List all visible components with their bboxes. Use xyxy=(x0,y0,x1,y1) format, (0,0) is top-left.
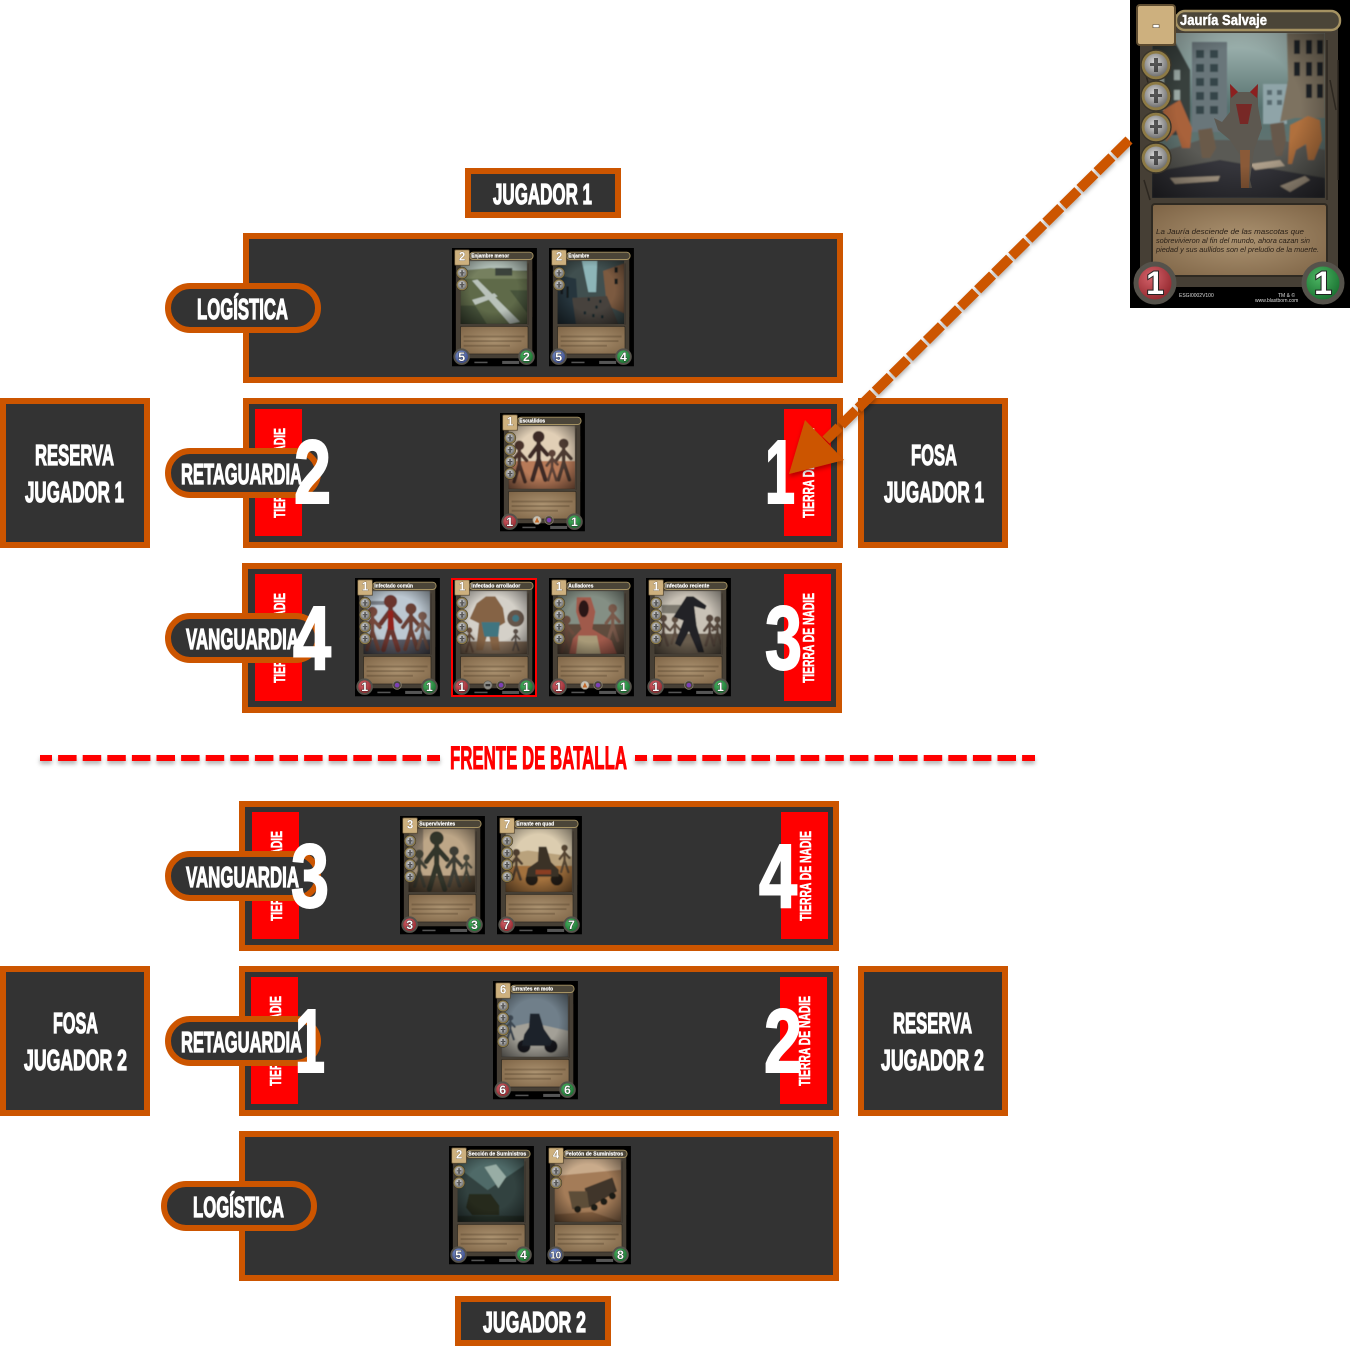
number 1: 1 xyxy=(765,423,795,523)
card: Enjambre menor: 2 xyxy=(523,350,530,364)
card: Sección de Suministros: 2 xyxy=(456,1150,462,1162)
card flavour text: La Jauría desciende de las mascotas que xyxy=(1156,227,1304,236)
card: Escuálidos: 1 xyxy=(506,515,513,529)
card: Infectado arrollador: 1 xyxy=(459,582,466,594)
card: Infectado común: 1 xyxy=(362,582,369,594)
pill: logistica player 2 xyxy=(164,1184,314,1228)
player 1 label xyxy=(468,171,618,215)
box: fosa jugador 2: JUGADOR 2 xyxy=(24,1045,127,1077)
card: Escuálidos: Escuálidos xyxy=(519,419,545,425)
pill: logistica player 2: LOGÍSTICA xyxy=(193,1190,284,1224)
number 2 player 2: 2 xyxy=(764,992,802,1092)
card: Infectado reciente: 1 xyxy=(717,680,724,694)
card flavour text xyxy=(1155,227,1319,254)
strip: tierra de nadie left xyxy=(255,409,302,536)
player 2 label xyxy=(458,1299,608,1343)
box: reserva jugador 1: JUGADOR 1 xyxy=(25,477,124,509)
card: Infectado reciente: 1 xyxy=(653,582,660,594)
strip: tierra de nadie right: TIERRA DE NADIE xyxy=(798,831,815,921)
pill: vanguardia player 2: VANGUARDIA xyxy=(186,862,299,894)
box: reserva jugador 2: JUGADOR 2 xyxy=(881,1045,984,1077)
card flavour text: piedad y sus aullidos son el preludio de la muerte. xyxy=(1155,245,1319,254)
card: Sección de Suministros xyxy=(449,1146,534,1264)
card: Sección de Suministros: 4 xyxy=(520,1248,527,1262)
box: reserva jugador 1 xyxy=(3,401,147,545)
card: Errante en quad: Errante en quad xyxy=(516,822,555,828)
card: Aulladores: 1 xyxy=(556,582,563,594)
card: Supervivientes: Supervivientes xyxy=(419,822,455,828)
card: Escuálidos: 1 xyxy=(571,515,578,529)
pill: retaguardia player 2 xyxy=(168,1019,318,1063)
pill: retaguardia player 1: RETAGUARDIA xyxy=(181,459,302,491)
card: Enjambre: Enjambre xyxy=(568,254,590,260)
card: Supervivientes: 3 xyxy=(407,820,413,832)
frente de batalla divider: FRENTE DE BATALLA xyxy=(450,740,627,776)
card: Infectado arrollador: 1 xyxy=(523,680,530,694)
box: fosa jugador 1: JUGADOR 1 xyxy=(884,477,984,509)
strip: tierra de nadie right: TIERRA DE NADIE xyxy=(801,428,818,518)
card: Aulladores: 1 xyxy=(620,680,627,694)
card art: wild dogs in ruined city xyxy=(1152,33,1325,198)
strip: tierra de nadie right: TIERRA DE NADIE xyxy=(801,593,818,683)
strip: tierra de nadie right xyxy=(784,574,831,701)
card attack value: 1 xyxy=(1146,265,1164,301)
strip: tierra de nadie left xyxy=(251,977,298,1104)
panel: retaguardia player 1 xyxy=(246,401,840,545)
strip: tierra de nadie left: TIERRA DE NADIE xyxy=(272,593,289,683)
card: Errantes en moto: 6 xyxy=(500,985,506,997)
number 3 player 2: 3 xyxy=(291,827,329,927)
card: Infectado reciente: 1 xyxy=(652,680,659,694)
card detail: Jauría Salvaje xyxy=(1130,0,1350,308)
strip: tierra de nadie left xyxy=(252,812,299,939)
card: Errantes en moto: 6 xyxy=(564,1083,571,1097)
card: Enjambre: 5 xyxy=(555,350,562,364)
box: reserva jugador 2: RESERVA xyxy=(893,1008,972,1040)
selected card outline xyxy=(452,579,536,696)
card: Infectado arrollador: 1 xyxy=(458,680,465,694)
pill: retaguardia player 1 xyxy=(168,451,318,495)
card: Supervivientes: 3 xyxy=(471,918,478,932)
box: fosa jugador 1: FOSA xyxy=(911,440,957,472)
card footer: www.blastborn.com xyxy=(1255,298,1298,304)
card: Infectado común: Infectado común xyxy=(374,584,413,590)
card: Pelotón de Suministros: 4 xyxy=(553,1150,560,1162)
card: Errante en quad: 7 xyxy=(568,918,575,932)
strip: tierra de nadie right: TIERRA DE NADIE xyxy=(797,996,814,1086)
card: Enjambre menor xyxy=(452,248,537,366)
card: Enjambre menor: 2 xyxy=(459,252,465,264)
card: Infectado común xyxy=(355,578,440,696)
pill: logistica player 1: LOGÍSTICA xyxy=(197,292,288,326)
card footer: TM & © xyxy=(1278,292,1295,299)
pill: vanguardia player 2 xyxy=(168,854,318,898)
strip: tierra de nadie left xyxy=(255,574,302,701)
pill: vanguardia player 1 xyxy=(168,616,318,660)
card: Enjambre menor: Enjambre menor xyxy=(471,254,510,260)
card: Infectado común: 1 xyxy=(361,680,368,694)
card: Sección de Suministros: 5 xyxy=(455,1248,462,1262)
strip: tierra de nadie left: TIERRA DE NADIE xyxy=(268,996,285,1086)
arrow: card detail to fosa slot xyxy=(789,140,1129,474)
card: Escuálidos: 1 xyxy=(507,417,514,429)
pill: logistica player 1 xyxy=(168,286,318,330)
box: reserva jugador 2 xyxy=(861,969,1005,1113)
card: Aulladores: Aulladores xyxy=(568,584,593,590)
box: fosa jugador 1 xyxy=(861,401,1005,545)
player 2 label: JUGADOR 2 xyxy=(483,1307,586,1339)
card: Enjambre xyxy=(549,248,634,366)
card: Enjambre: 2 xyxy=(556,252,562,264)
pill: vanguardia player 1: VANGUARDIA xyxy=(186,624,299,656)
card footer: ESGI0002V100 xyxy=(1179,293,1214,299)
panel: logistica player 1 xyxy=(246,236,840,380)
box: fosa jugador 2: FOSA xyxy=(53,1008,98,1040)
card footer xyxy=(1179,292,1298,304)
card: Supervivientes xyxy=(400,816,485,934)
number 4 player 2: 4 xyxy=(759,827,797,927)
card: Infectado común: 1 xyxy=(426,680,433,694)
strip: tierra de nadie left: TIERRA DE NADIE xyxy=(269,831,286,921)
card: Sección de Suministros: Sección de Suministros xyxy=(468,1152,526,1158)
card: Infectado arrollador: Infectado arrollador xyxy=(471,584,521,590)
card: Enjambre: 4 xyxy=(620,350,627,364)
card: Enjambre menor: 5 xyxy=(458,350,465,364)
strip: tierra de nadie right xyxy=(780,977,827,1104)
card title: Jauría Salvaje xyxy=(1180,12,1267,29)
number 1 player 2: 1 xyxy=(295,992,325,1092)
card: Pelotón de Suministros: 10 xyxy=(550,1251,562,1262)
card: Errante en quad: 7 xyxy=(503,918,510,932)
card flavour text: sobrevivieron al fin del mundo, ahora cazan sin xyxy=(1156,236,1310,245)
number 3: 3 xyxy=(765,589,802,689)
card: Pelotón de Suministros: 8 xyxy=(617,1248,624,1262)
card: Errantes en moto: Errantes en moto xyxy=(512,987,554,993)
card: Aulladores: 1 xyxy=(555,680,562,694)
box: fosa jugador 2 xyxy=(3,969,147,1113)
card: Pelotón de Suministros: Pelotón de Suministros xyxy=(565,1152,623,1158)
player 1 label: JUGADOR 1 xyxy=(493,179,592,211)
card cost: - xyxy=(1152,12,1160,37)
strip: tierra de nadie right xyxy=(784,409,831,536)
panel: vanguardia player 1 xyxy=(245,566,839,710)
card: Infectado arrollador xyxy=(452,578,537,696)
card: Infectado reciente: Infectado reciente xyxy=(665,584,710,590)
card defence value: 1 xyxy=(1314,265,1332,301)
card: Aulladores xyxy=(549,578,634,696)
strip: tierra de nadie right xyxy=(781,812,828,939)
strip: tierra de nadie left: TIERRA DE NADIE xyxy=(272,428,289,518)
panel: retaguardia player 2 xyxy=(242,969,836,1113)
card: Errantes en moto xyxy=(493,981,578,1099)
pill: retaguardia player 2: RETAGUARDIA xyxy=(181,1027,302,1059)
card: Errante en quad xyxy=(497,816,582,934)
card: Infectado reciente xyxy=(646,578,731,696)
number 4: 4 xyxy=(293,589,331,689)
card: Supervivientes: 3 xyxy=(406,918,413,932)
card: Errante en quad: 7 xyxy=(504,820,510,832)
panel: vanguardia player 2 xyxy=(242,804,836,948)
card: Escuálidos xyxy=(500,413,585,531)
number 2: 2 xyxy=(294,423,331,523)
card: Pelotón de Suministros xyxy=(546,1146,631,1264)
box: reserva jugador 1: RESERVA xyxy=(35,440,114,472)
panel: logistica player 2 xyxy=(242,1134,836,1278)
card: Errantes en moto: 6 xyxy=(499,1083,506,1097)
